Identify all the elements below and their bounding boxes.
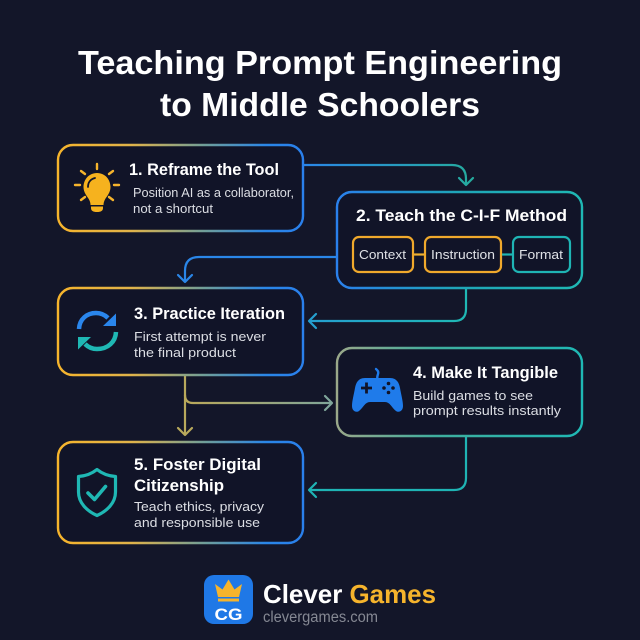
- description: and responsible use: [134, 515, 260, 530]
- brand name: Clever Games: [263, 579, 436, 609]
- description: [134, 499, 265, 530]
- arrow: step 2 down to step 3 side: [309, 288, 466, 328]
- logo: Clever Games: [204, 575, 436, 626]
- arrow: step 1 to step 2: [303, 165, 473, 185]
- description: Teach ethics, privacy: [134, 499, 265, 514]
- panel: step 2 teach the C-I-F method: [337, 192, 582, 288]
- chip: format: Format: [519, 247, 563, 262]
- icon: shield with check: [78, 470, 116, 516]
- chip: instruction: [425, 237, 501, 272]
- arrow: step 4 to step 5: [309, 436, 466, 497]
- icon: light bulb: [75, 164, 119, 212]
- connector: instruction to format: [501, 253, 513, 256]
- panel: step 4 make it tangible: [337, 348, 582, 436]
- heading: Citizenship: [134, 476, 224, 495]
- description: Position AI as a collaborator,: [133, 185, 294, 200]
- panel: step 3 practice iteration: [58, 288, 303, 375]
- description: the final product: [134, 345, 236, 360]
- arrow: step 2 to step 3: [178, 257, 337, 282]
- website: clevergames.com: [263, 609, 378, 626]
- heading: 1. Reframe the Tool: [129, 160, 279, 179]
- arrow: step 3 to step 4 and step 5: [178, 375, 332, 435]
- description: prompt results instantly: [413, 403, 562, 418]
- icon: refresh arrows: [78, 313, 116, 350]
- icon: crown app badge: [204, 575, 253, 624]
- heading: 5. Foster Digital: [134, 455, 261, 474]
- title: to Middle Schoolers: [160, 86, 480, 123]
- title: Teaching Prompt Engineering: [78, 44, 562, 81]
- description: [133, 185, 294, 216]
- chip: format: [513, 237, 570, 272]
- connector: context to instruction: [413, 253, 425, 256]
- heading: 3. Practice Iteration: [134, 304, 285, 323]
- chip: context: [353, 237, 413, 272]
- description: [134, 329, 267, 360]
- panel: step 5 foster digital citizenship: [58, 442, 303, 543]
- heading: 2. Teach the C-I-F Method: [356, 206, 567, 225]
- heading: [134, 455, 261, 495]
- icon: game controller: [352, 369, 403, 412]
- description: Build games to see: [413, 388, 533, 403]
- description: not a shortcut: [133, 201, 213, 216]
- chip: instruction: Instruction: [431, 247, 495, 262]
- description: First attempt is never: [134, 329, 267, 344]
- description: [413, 388, 562, 418]
- chip: context: Context: [359, 247, 406, 262]
- icon: crown app badge: CG: [214, 605, 242, 624]
- heading: 4. Make It Tangible: [413, 363, 558, 382]
- panel: step 1 reframe the tool: [58, 145, 303, 231]
- title: [78, 44, 562, 123]
